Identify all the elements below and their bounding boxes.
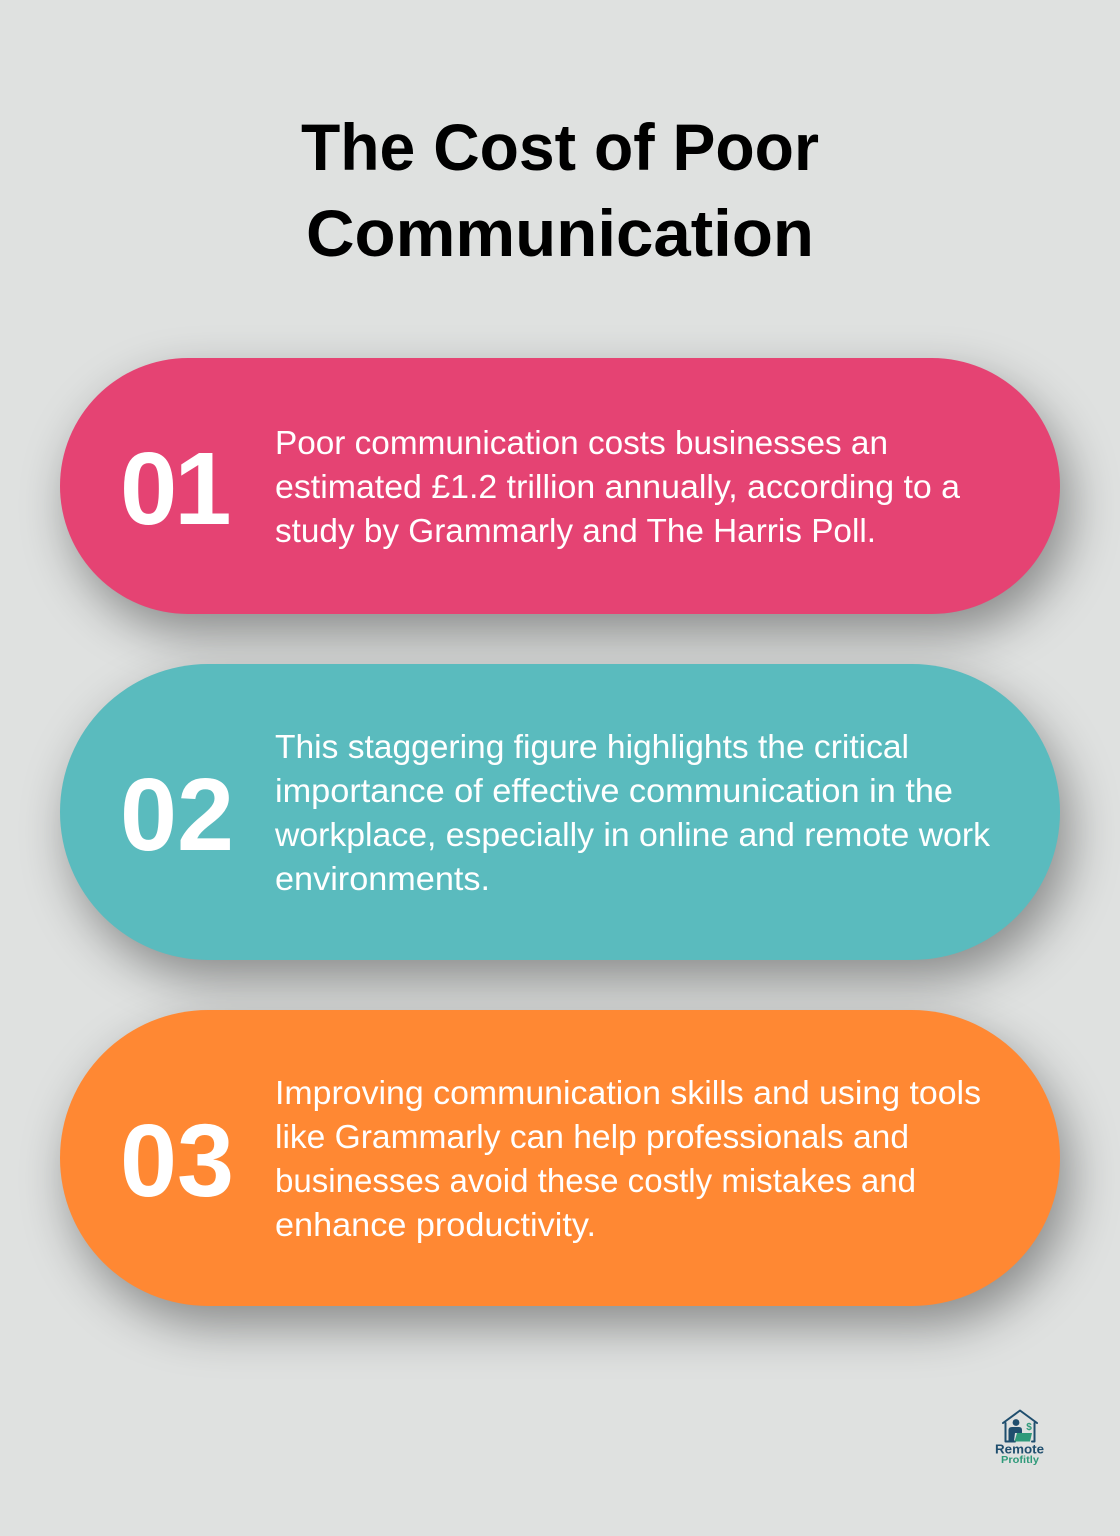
- icon: Remote Profitly logo: Profitly: [1001, 1455, 1039, 1466]
- text block 02: environments.: [275, 860, 490, 897]
- text block 03: [275, 1074, 981, 1243]
- text block 01: [275, 424, 961, 549]
- icon: Remote Profitly logo: $: [1026, 1422, 1032, 1433]
- title: Communication: [306, 196, 814, 270]
- title: [301, 110, 819, 270]
- title: The Cost of Poor: [301, 110, 819, 184]
- text block 01: Poor communication costs businesses an: [275, 424, 888, 461]
- number 01: 01: [120, 431, 232, 546]
- text block 03: Improving communication skills and using tools: [275, 1074, 981, 1111]
- panel: card 01: [60, 358, 1060, 614]
- icon: Remote Profitly logo: [995, 1410, 1044, 1466]
- text block 03: enhance productivity.: [275, 1206, 596, 1243]
- text block 02: This staggering figure highlights the critical: [275, 728, 909, 765]
- panel: card 03: [60, 1010, 1060, 1306]
- number 02: 02: [120, 757, 234, 872]
- number 03: 03: [120, 1103, 234, 1218]
- text block 03: like Grammarly can help professionals and: [275, 1118, 909, 1155]
- panel: card 02: [60, 664, 1060, 960]
- text block 03: businesses avoid these costly mistakes and: [275, 1162, 916, 1199]
- icon: Remote Profitly logo: Remote: [995, 1442, 1044, 1456]
- text block 01: estimated £1.2 trillion annually, according to a: [275, 468, 961, 505]
- text block 02: importance of effective communication in the: [275, 772, 953, 809]
- text block 02: [274, 728, 991, 897]
- text block 02: workplace, especially in online and remote work: [274, 816, 991, 853]
- text block 01: study by Grammarly and The Harris Poll.: [275, 512, 876, 549]
